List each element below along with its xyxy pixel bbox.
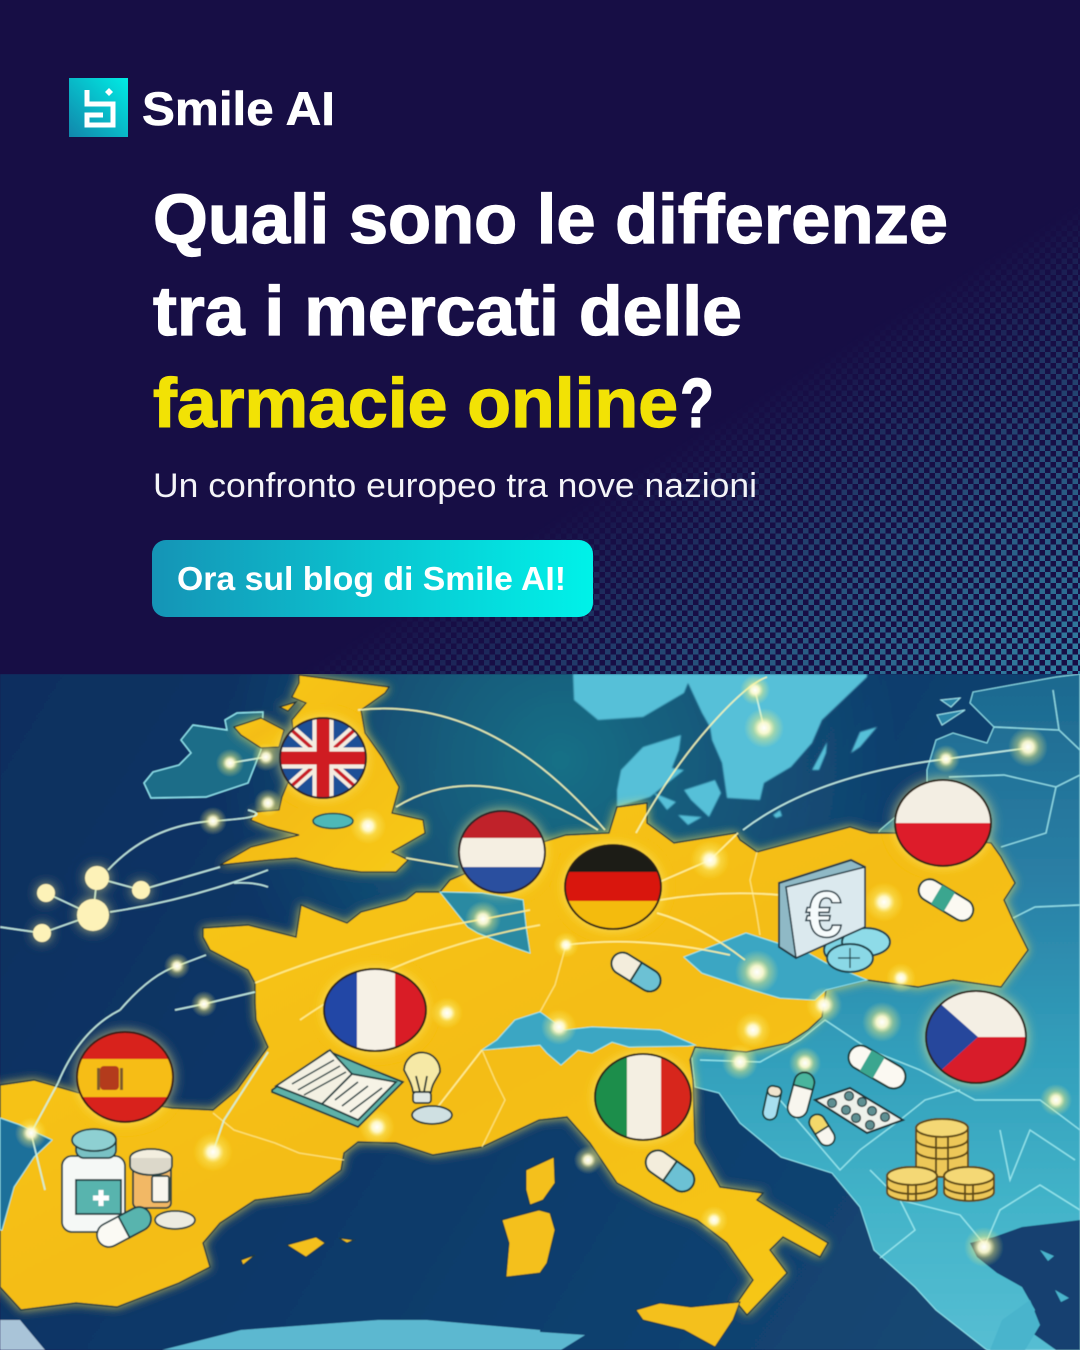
Aegean sea [970,1220,1080,1350]
icon: light bulb [404,1052,452,1124]
icon: logo square [69,78,128,137]
connection lines [0,677,1028,1190]
map: Europe [0,674,1080,1350]
title: Quali sono le differenze [153,180,948,258]
title: farmacie online [153,364,678,442]
flag: France [323,968,428,1052]
button: call to action [152,540,593,617]
sea [0,674,1080,1350]
icon: capsule near Czech flag [844,1041,910,1093]
title: ? [680,364,714,442]
icon: blister pack [815,1088,903,1133]
land: Scandinavia and Denmark [573,674,877,825]
flag: Germany [564,844,662,931]
flag: Spain [76,1031,174,1123]
land: continental yellow region [0,803,1028,1315]
brand name: Smile AI [142,82,335,135]
land: islands [241,1157,740,1347]
icon: coin stacks [887,1119,994,1201]
bottle [62,1129,125,1232]
title: tra i mercati delle [153,272,742,350]
pill: UK [313,814,353,828]
jar [130,1149,172,1208]
flag: Czech Republic [925,990,1027,1085]
icon: medicine bottle and jar [62,1129,195,1251]
icon: capsule Germany [607,948,665,996]
flag: Netherlands [458,810,548,895]
icon: small capsules [762,1070,838,1149]
network nodes [33,866,150,942]
icon: capsule Poland [915,875,977,925]
checker pattern [342,231,1080,674]
icon: euro card with pills: € [806,877,842,951]
land: eastern Europe and Balkans [690,674,1080,1350]
flag: Italy [594,1053,694,1141]
panel: header background [0,0,1080,675]
icon: euro card with pills [779,860,890,972]
land: Great Britain [220,675,425,872]
capsule [93,1203,155,1251]
land: teal overlays [0,892,867,1350]
flag: Poland [894,779,992,868]
glow dots [15,675,1072,1267]
icon: book [272,1050,403,1127]
icon: capsule Italy [641,1146,699,1196]
logo: Smile AI [69,78,335,137]
flag: United Kingdom [278,716,368,800]
country borders on yellow [213,852,760,1160]
land: Ireland [144,712,263,798]
button: call to action: Ora sul blog di Smile AI! [177,560,566,597]
title [153,180,948,442]
tablet [155,1211,195,1229]
subtitle: Un confronto europeo tra nove nazioni [153,467,757,505]
